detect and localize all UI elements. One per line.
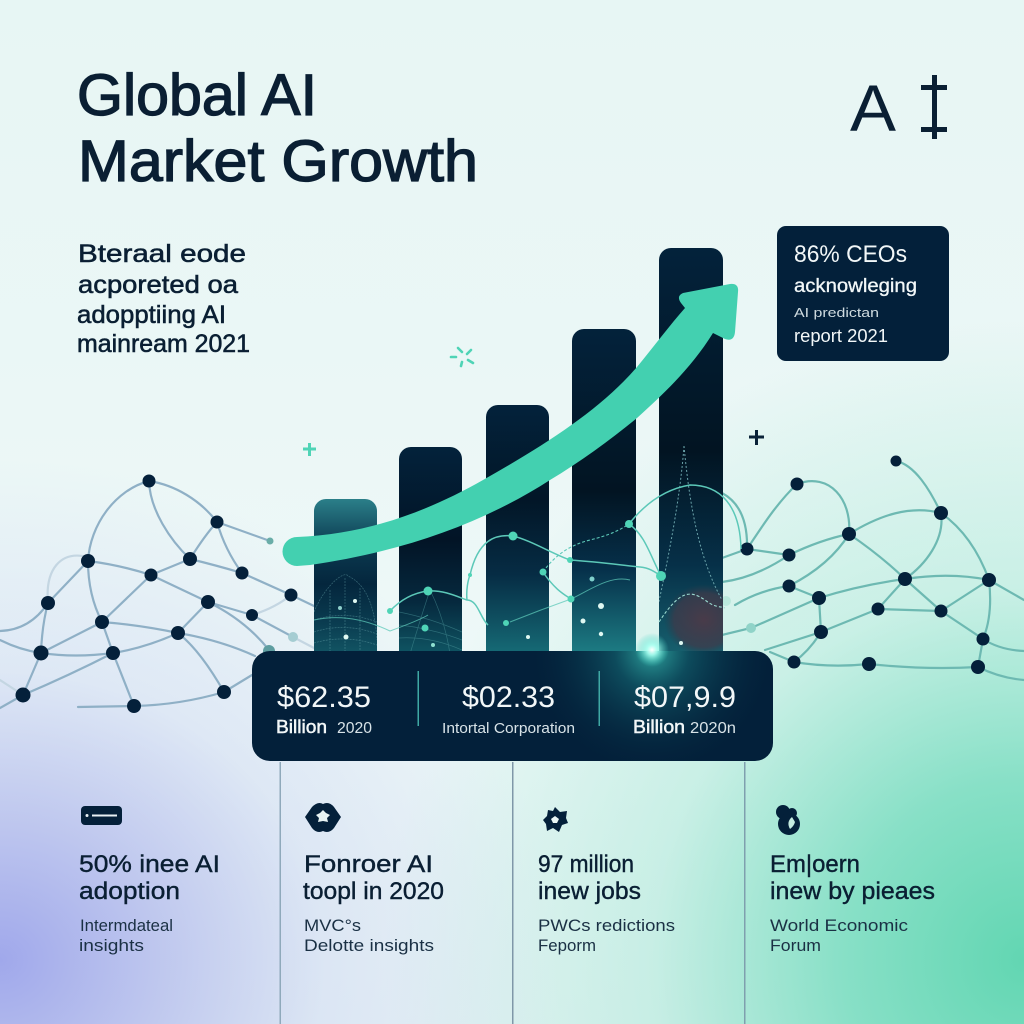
callout: CEO statistic: acknowleging	[794, 276, 917, 297]
stat column: AI tools: MVC°s	[304, 916, 361, 935]
bar 2021	[399, 447, 462, 654]
AI logo mark: A	[850, 71, 896, 145]
value column 3: Billion	[633, 717, 685, 737]
mesh in second bar	[399, 590, 462, 654]
stat column: AI tools: Delotte insights	[304, 936, 434, 955]
title: Global AI	[77, 63, 317, 128]
right network	[721, 456, 1024, 680]
icon: server bar	[81, 806, 122, 825]
mesh in first bar	[314, 575, 377, 654]
title	[77, 63, 478, 194]
stat column: adoption: Intermdateal	[80, 916, 173, 935]
icon: blob mark	[776, 805, 800, 835]
icon: star gear	[543, 807, 568, 832]
stat column: jobs: Feporm	[538, 936, 596, 955]
left network	[0, 474, 314, 713]
stat column: jobs: 97 million	[538, 851, 634, 878]
bar 2022	[486, 405, 549, 654]
value column 1: 2020	[337, 720, 372, 737]
stat column: AI tools	[303, 803, 444, 955]
value column 1: $62.35	[277, 681, 371, 714]
market value panel	[252, 651, 773, 761]
bar 2024	[659, 248, 723, 654]
rust glow in last bar	[659, 446, 723, 651]
bar 2023	[572, 329, 636, 654]
stat column: adoption: adoption	[79, 878, 180, 905]
plus icon teal	[303, 443, 316, 456]
value column 3: $07,9.9	[634, 681, 736, 714]
column dividers	[280, 762, 746, 1024]
bar chart	[314, 248, 744, 656]
icon: flower badge	[305, 803, 341, 832]
stat column: AI tools: Fonroer AI	[304, 851, 433, 878]
bar 2020	[314, 499, 377, 654]
stat column: jobs: PWCs redictions	[538, 916, 675, 935]
stat column: adoption: 50% inee AI	[79, 851, 220, 878]
stat column: forum: inew by pieaes	[770, 878, 935, 905]
title: Market Growth	[78, 129, 478, 194]
value column 3	[633, 681, 736, 737]
intro text block: acporeted oa	[78, 271, 238, 299]
AI logo mark	[850, 71, 947, 145]
stat column: forum: Forum	[770, 936, 821, 955]
value column 2: $02.33	[462, 681, 555, 714]
stat column: forum: Em|oern	[770, 851, 860, 878]
value column 1: Billion	[276, 717, 327, 737]
stat column: adoption	[79, 806, 220, 955]
stat column: jobs	[538, 807, 675, 955]
callout: CEO statistic: 86% CEOs	[794, 241, 907, 268]
stat column: adoption: insights	[79, 936, 144, 955]
intro text block: mainream 2021	[77, 330, 250, 358]
growth arrow	[282, 284, 738, 566]
value column 2: Intortal Corporation	[442, 720, 575, 737]
light flare	[635, 633, 669, 667]
callout: CEO statistic: report 2021	[794, 326, 888, 346]
stat column: forum: World Economic	[770, 916, 909, 935]
value column 1	[276, 681, 372, 737]
plus icon dark	[749, 430, 764, 445]
callout: CEO statistic	[777, 226, 949, 361]
glowing data dots	[338, 520, 683, 647]
sparkle decoration	[451, 348, 473, 366]
intro text block: adopptiing AI	[77, 301, 226, 329]
intro text block	[77, 240, 250, 358]
teal connecting lines across bars	[314, 485, 741, 631]
intro text block: Bteraal eode	[78, 240, 246, 268]
value column 3: 2020n	[690, 720, 736, 737]
stat column: jobs: inew jobs	[538, 878, 641, 905]
stat column: forum	[770, 805, 935, 955]
callout: CEO statistic: AI predictan	[794, 305, 879, 320]
stat column: AI tools: toopl in 2020	[303, 878, 444, 905]
value column 2	[442, 681, 575, 737]
